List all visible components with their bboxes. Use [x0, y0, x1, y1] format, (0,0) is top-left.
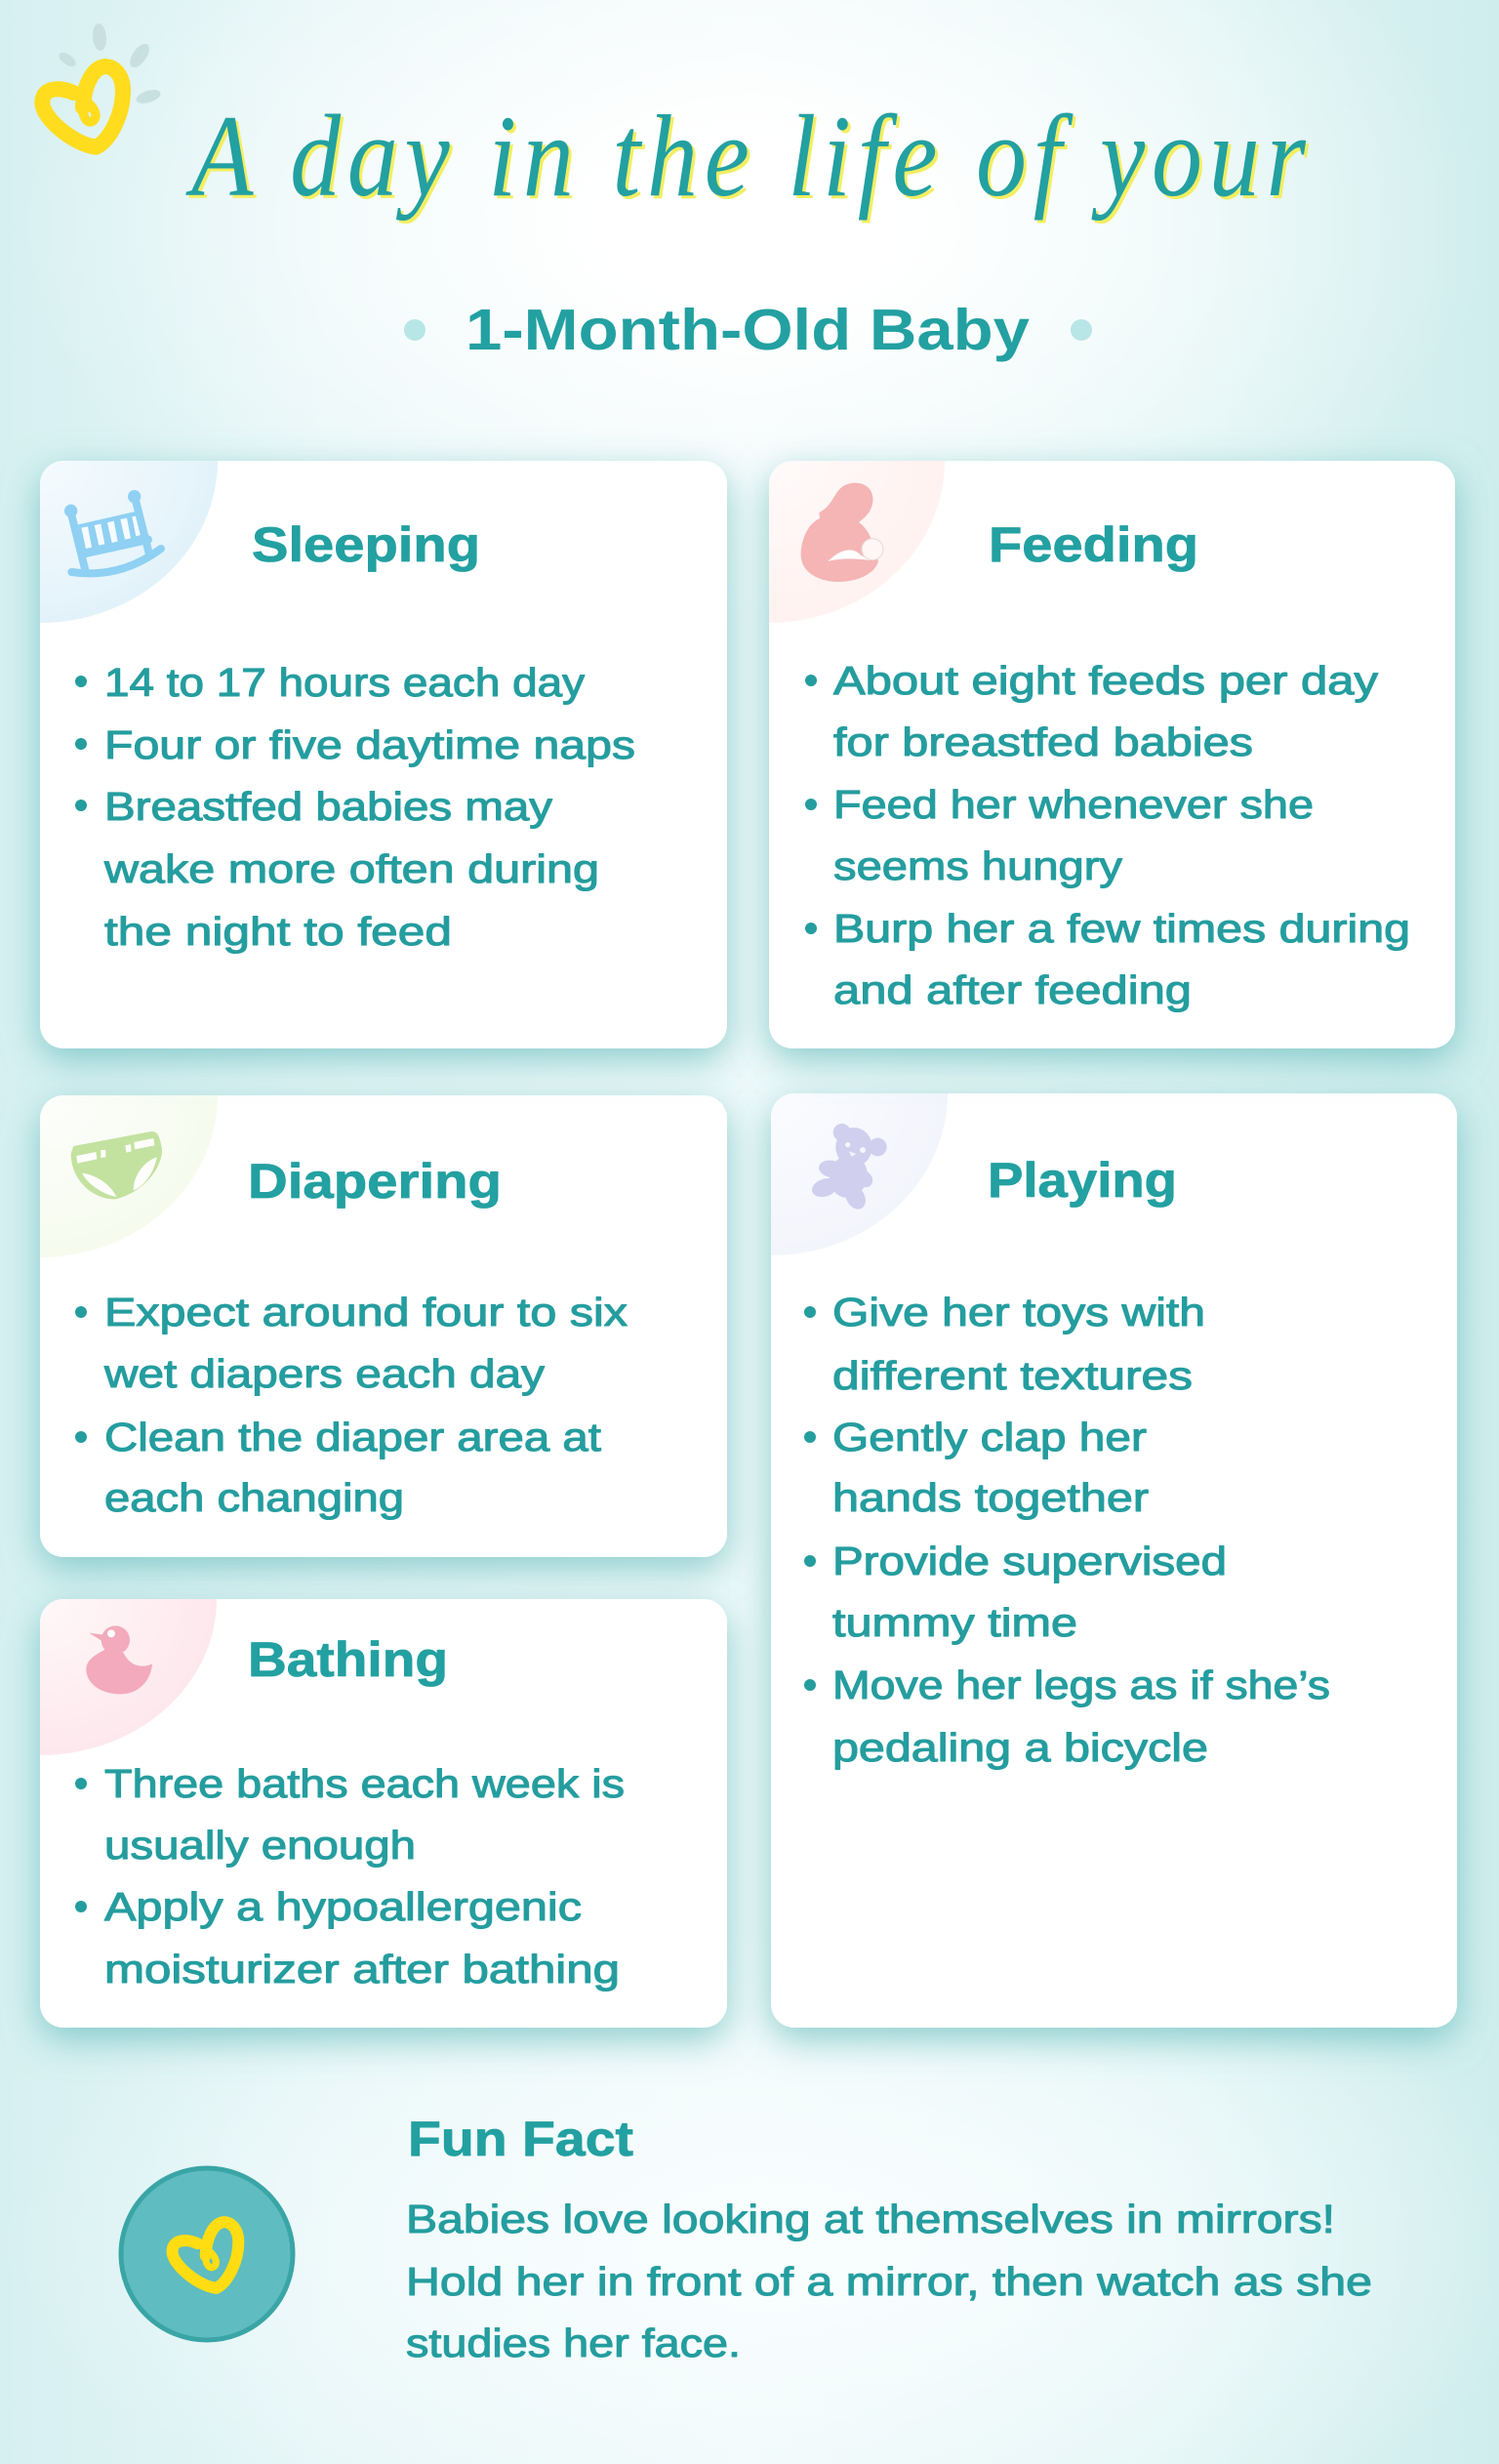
text: fun fact: Babies love looking at themselves in mirrors! — [406, 2197, 1335, 2241]
heading: bathing: Bathing — [248, 1632, 448, 1687]
heading: diapering: Diapering — [248, 1154, 502, 1209]
list: playing: Give her toys with — [832, 1290, 1205, 1335]
panel: bathing — [40, 1599, 727, 2028]
list: diapering: Clean the diaper area at — [104, 1415, 602, 1459]
subtitle: 1-Month-Old Baby — [466, 298, 1030, 362]
list: playing: Gently clap her — [832, 1415, 1147, 1459]
list: bathing: Three baths each week is — [104, 1761, 625, 1806]
text: fun fact: Hold her in front of a mirror, then watch as she — [406, 2259, 1372, 2304]
list: diapering — [75, 1290, 628, 1520]
list: sleeping: Four or five daytime naps — [104, 722, 635, 767]
list: playing: Move her legs as if she’s — [832, 1663, 1330, 1707]
list: sleeping: the night to feed — [104, 909, 452, 954]
logo: yellow heart with rays — [42, 22, 162, 147]
text: fun fact: studies her face. — [406, 2320, 741, 2365]
text: fun fact — [406, 2197, 1372, 2365]
list: diapering: wet diapers each day — [103, 1351, 546, 1396]
list: diapering: each changing — [104, 1475, 404, 1520]
list: bathing — [75, 1761, 625, 1992]
icon: teddy bear — [810, 1124, 887, 1212]
title: A day in the life of your — [185, 92, 1306, 222]
heading: fun fact: Fun Fact — [408, 2112, 633, 2166]
icon: heart badge — [121, 2168, 293, 2340]
list: playing: hands together — [832, 1475, 1149, 1520]
icon: rubber duck — [86, 1625, 152, 1694]
panel: sleeping — [40, 461, 727, 1048]
list: playing — [804, 1290, 1330, 1770]
list: bathing: moisturizer after bathing — [104, 1947, 620, 1992]
list: feeding: for breastfed babies — [833, 719, 1253, 764]
panel: playing — [771, 1093, 1457, 2028]
list: feeding — [805, 658, 1410, 1012]
list: feeding: Feed her whenever she — [833, 782, 1314, 827]
list: playing: different textures — [832, 1353, 1193, 1398]
icon: mother nursing baby — [801, 483, 883, 582]
icon: diaper — [71, 1131, 162, 1199]
title: A day in the life of your — [188, 95, 1309, 225]
heading: feeding: Feeding — [989, 517, 1198, 572]
list: playing: tummy time — [832, 1600, 1077, 1645]
icon: crib — [64, 490, 161, 573]
list: bathing: usually enough — [104, 1823, 416, 1868]
list: sleeping: Breastfed babies may — [104, 784, 553, 829]
panel: diapering — [40, 1095, 727, 1557]
list: playing: Provide supervised — [832, 1539, 1227, 1583]
list: bathing: Apply a hypoallergenic — [104, 1884, 582, 1929]
list: sleeping: 14 to 17 hours each day — [104, 660, 586, 705]
list: playing: pedaling a bicycle — [832, 1725, 1208, 1770]
fun fact — [406, 2112, 1372, 2365]
list: feeding: Burp her a few times during — [833, 906, 1410, 951]
list: feeding: seems hungry — [833, 843, 1123, 888]
list: diapering: Expect around four to six — [104, 1290, 628, 1335]
list: sleeping — [75, 660, 635, 954]
heading: playing: Playing — [988, 1153, 1177, 1208]
list: feeding: About eight feeds per day — [833, 658, 1379, 703]
list: sleeping: wake more often during — [103, 846, 599, 891]
heading: sleeping: Sleeping — [252, 517, 480, 572]
panel: feeding — [769, 461, 1455, 1048]
list: feeding: and after feeding — [833, 967, 1192, 1012]
